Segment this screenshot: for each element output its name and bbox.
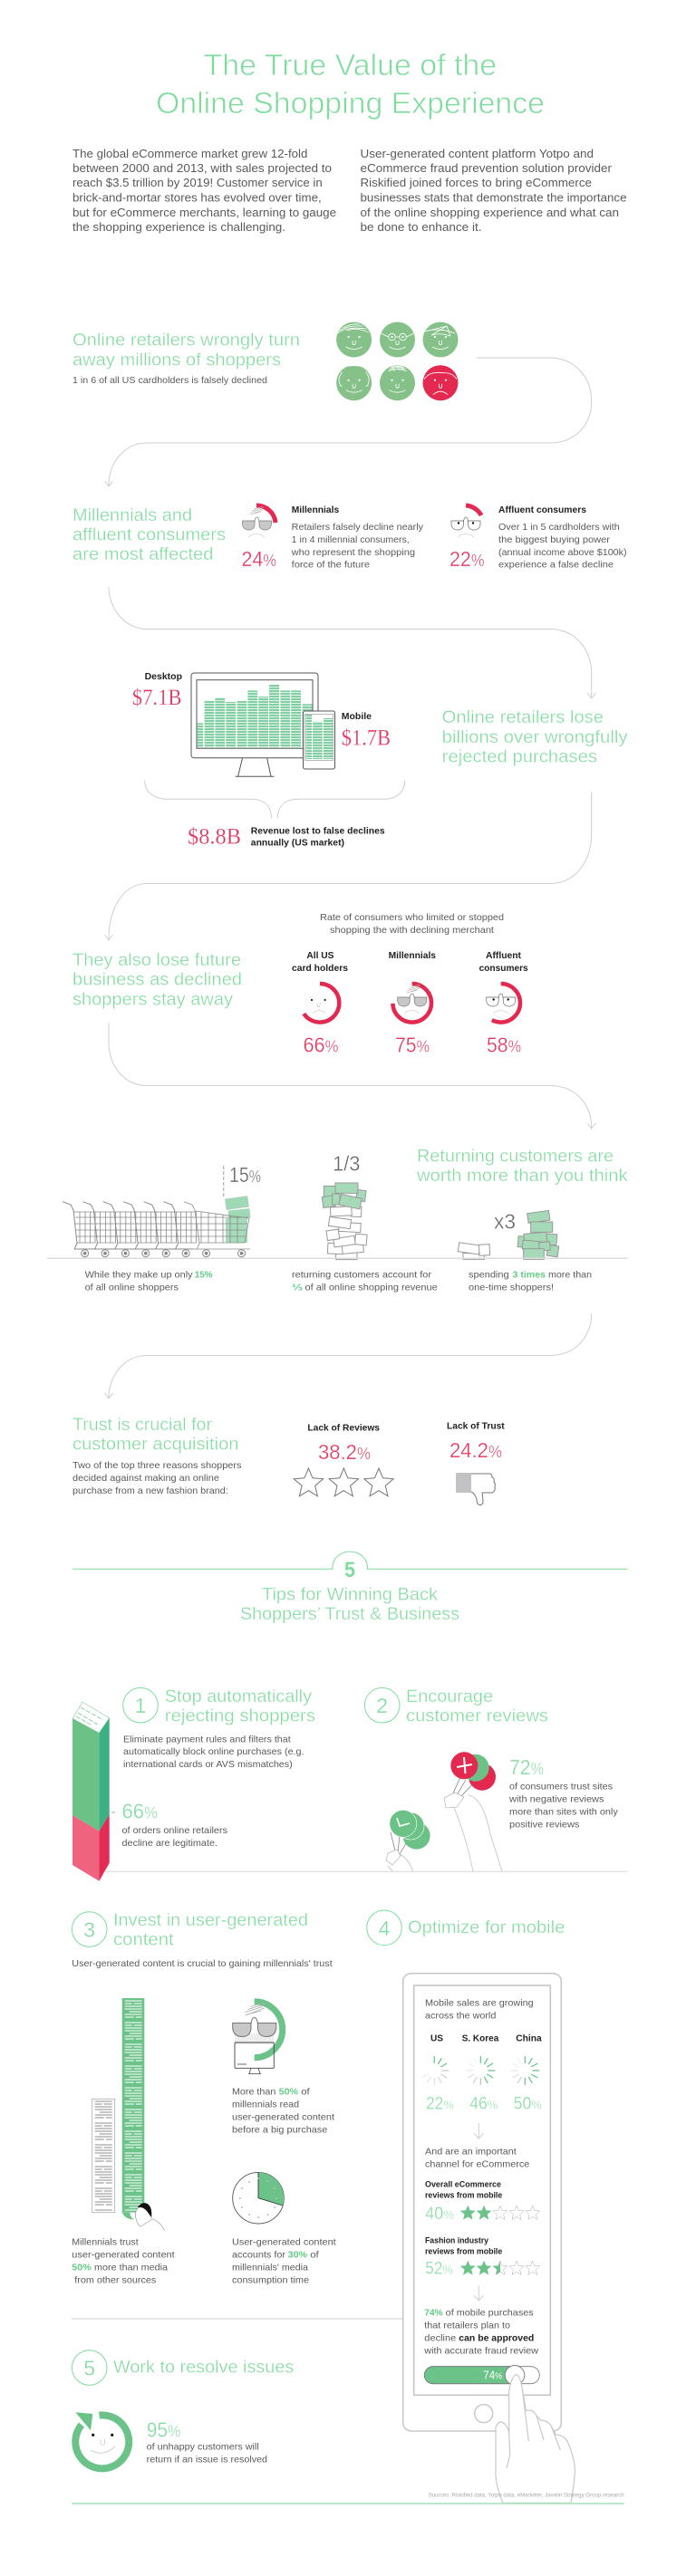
phone text: 74% can be approved: can be approved xyxy=(459,2333,534,2344)
phone text: 74% can be approved: decline xyxy=(424,2333,456,2344)
stat: 15% with dashed marker: 15% xyxy=(229,1163,261,1187)
connector arrow 3 xyxy=(105,792,592,940)
caption: 30% media time: 30% xyxy=(288,2250,308,2261)
connector arrow 5 xyxy=(105,1313,592,1399)
ring chart: all US card holders: All US xyxy=(306,950,334,961)
stat: overall reviews 40%: reviews from mobile xyxy=(425,2190,502,2200)
stat: 1/3: 1/3 xyxy=(333,1152,361,1176)
mobile label: $1.7B xyxy=(342,726,391,751)
stat: 66% legitimate: decline are legitimate. xyxy=(121,1838,218,1849)
icon: clock pie 30% xyxy=(233,2172,284,2224)
stat: 95%: 95% xyxy=(147,2418,180,2442)
connector arrow 1 xyxy=(105,358,592,486)
divider with 5 badge: 5 xyxy=(344,1558,355,1582)
toggle 74%: 74% xyxy=(483,2369,502,2382)
tip 5 heading: 5 xyxy=(83,2357,95,2380)
heading: wrongly turn away: away millions of shoppers xyxy=(72,351,281,370)
heading: millennials and affluent xyxy=(72,506,226,564)
icon: small white box stack xyxy=(458,1243,490,1259)
caption: 50% read UGC: user-generated content xyxy=(232,2112,334,2123)
tip 3 subtitle: User-generated content is crucial to gaining millennials' trust xyxy=(72,1958,333,1969)
heading: lose billions: Online retailers lose xyxy=(442,708,604,727)
icon: six faces xyxy=(336,322,459,400)
heading: wrongly turn away xyxy=(72,332,300,370)
spinner: US 22% xyxy=(421,2033,454,2113)
sources note: Sources: Riskified data, Yotpo data, eMarketer, Javelin Strategy Group research xyxy=(429,2493,624,2499)
phone text: 74% can be approved: that retailers plan to xyxy=(424,2321,510,2331)
divider xyxy=(72,2318,403,2320)
heading: millennials and affluent: Millennials and xyxy=(72,506,192,525)
trust text: purchase from a new fashion brand: xyxy=(72,1485,228,1496)
total revenue lost: Revenue lost to false declines xyxy=(251,826,385,837)
heading: lose billions: billions over wrongfully xyxy=(442,728,628,747)
icon: millennials arc xyxy=(243,505,276,537)
ring chart: all US card holders: card holders xyxy=(292,963,348,974)
caption: 15% of shoppers: 15% xyxy=(195,1270,213,1281)
title xyxy=(156,48,545,120)
stat: 66% legitimate: 66% xyxy=(121,1799,158,1822)
heading: lose future business: business as declined xyxy=(72,971,242,990)
heading: returning customers: worth more than you think xyxy=(416,1167,628,1186)
affluent text: Affluent consumers xyxy=(498,505,586,515)
stat: overall reviews 40%: 40% xyxy=(425,2205,454,2224)
tip 1 text: Eliminate payment rules and filters that xyxy=(123,1734,291,1745)
heading: returning customers xyxy=(416,1148,628,1186)
trust text: Two of the top three reasons shoppers xyxy=(72,1460,241,1471)
rate caption: Rate of consumers who limited or stopped xyxy=(320,912,504,923)
heading: lose future business: shoppers stay away xyxy=(72,990,234,1009)
trust text xyxy=(72,1460,241,1496)
heading: returning customers: Returning customers are xyxy=(417,1148,614,1167)
affluent text: (annual income above $100k) xyxy=(498,547,627,558)
desktop label xyxy=(132,671,182,710)
intro text left: the shopping experience is challenging. xyxy=(72,220,285,234)
tip 5 heading xyxy=(72,2350,294,2385)
intro text right: User-generated content platform Yotpo and xyxy=(361,147,594,160)
stat: 72%: positive reviews xyxy=(509,1820,579,1831)
ring chart: millennials: Millennials xyxy=(389,950,436,961)
caption: 15% of shoppers: of all online shoppers xyxy=(85,1283,179,1293)
arrow down xyxy=(474,2123,484,2139)
caption: 50% read UGC: millennials read xyxy=(232,2100,299,2110)
spinner: US 22%: 22% xyxy=(426,2094,454,2113)
caption: 50% more than media xyxy=(72,2237,175,2286)
caption: 3 times spend xyxy=(469,1270,592,1293)
icon: 3D card bar xyxy=(72,1702,110,1881)
caption: 15% of shoppers xyxy=(85,1270,213,1293)
stat: 72%: 72% xyxy=(509,1755,544,1779)
millennials text: force of the future xyxy=(292,560,370,571)
stat: x3: x3 xyxy=(494,1210,516,1234)
lack of trust stat: Lack of Trust xyxy=(447,1420,505,1431)
heading: millennials and affluent: are most affected xyxy=(72,545,214,564)
ring chart: millennials: 75% xyxy=(395,1033,430,1057)
heading: millennials and affluent: affluent consumers xyxy=(72,526,226,545)
stat: 15% with dashed marker xyxy=(224,1163,261,1198)
bottom rule xyxy=(72,2503,624,2504)
tip 2 heading xyxy=(364,1687,548,1726)
subtext: 1 in 6: 1 in 6 of all US cardholders is falsely declined xyxy=(72,375,267,386)
heading: trust is crucial: Trust is crucial for xyxy=(72,1416,213,1435)
intro text right: businesses stats that demonstrate the importance xyxy=(361,190,627,205)
caption: 30% media time: accounts for xyxy=(232,2250,286,2261)
affluent text: experience a false decline xyxy=(498,560,614,571)
caption: 50% more than media: from other sources xyxy=(74,2275,156,2286)
tip 3 heading xyxy=(72,1911,308,1949)
tip 5 heading: Work to resolve issues xyxy=(113,2358,294,2377)
stat: fashion reviews 52%: 52% xyxy=(425,2260,453,2279)
spinner: China 50%: China xyxy=(516,2033,542,2043)
tip 1 heading: 1 xyxy=(135,1694,146,1717)
stat: fashion reviews 52%: reviews from mobile xyxy=(425,2246,502,2256)
total revenue lost xyxy=(188,825,385,850)
icon: three stars xyxy=(294,1468,393,1496)
lack of reviews stat: Lack of Reviews xyxy=(307,1422,380,1433)
intro text left xyxy=(72,147,336,234)
spinner: US 22%: US xyxy=(430,2033,443,2043)
icon: media document xyxy=(92,2099,115,2213)
lack of trust stat xyxy=(447,1420,505,1462)
heading: 5 tips: Shoppers’ Trust & Business xyxy=(240,1605,459,1624)
total revenue lost: annually (US market) xyxy=(251,837,344,848)
caption: 3 times spend: spending xyxy=(469,1270,509,1281)
caption: 50% read UGC xyxy=(232,2087,334,2136)
caption: 3 times spend: 3 times xyxy=(513,1270,546,1281)
ring chart: all US card holders: 66% xyxy=(303,1033,338,1057)
caption: 50% more than media: 50% xyxy=(72,2263,92,2273)
millennials text: 1 in 4 millennial consumers, xyxy=(292,534,410,545)
icon: hand with plus signs xyxy=(444,1752,502,1871)
phone text: sales growing: across the world xyxy=(425,2010,496,2021)
affluent text: Over 1 in 5 cardholders with xyxy=(498,522,620,533)
rate caption xyxy=(320,912,504,936)
desktop label: Desktop xyxy=(145,671,182,682)
caption: 50% read UGC: of xyxy=(301,2087,310,2098)
spinner: S. Korea 46%: 46% xyxy=(469,2094,498,2113)
tip 3 heading: content xyxy=(113,1930,174,1949)
stat: 66% legitimate xyxy=(105,1799,227,1849)
stat: 66% legitimate: of orders online retailers xyxy=(121,1825,227,1836)
lack of trust stat: 24.2% xyxy=(450,1438,502,1462)
intro text left: reach $3.5 trillion by 2019! Customer service in xyxy=(72,176,323,189)
lack of reviews stat: 38.2% xyxy=(318,1440,371,1464)
panel: phone frame xyxy=(403,1974,561,2431)
ground line xyxy=(47,1257,628,1259)
heading: lose billions: rejected purchases xyxy=(442,748,597,767)
stat: 22%: 22% xyxy=(450,547,484,571)
intro text left: brick-and-mortar stores has evolved over time, xyxy=(72,190,322,205)
tip 4 heading: 4 xyxy=(379,1917,391,1940)
mobile label: Mobile xyxy=(342,711,372,722)
intro text right: of the online shopping experience and what can xyxy=(361,206,619,219)
millennials text: Millennials xyxy=(292,505,339,515)
caption: 50% read UGC: before a big purchase xyxy=(232,2125,327,2136)
tip 1 heading: rejecting shoppers xyxy=(165,1707,315,1726)
tip 3 heading: Invest in user-generated xyxy=(113,1911,308,1930)
stat: 95%: return if an issue is resolved xyxy=(147,2455,267,2465)
stat: 95% xyxy=(147,2418,267,2465)
phone text: important channel xyxy=(425,2147,529,2170)
stat: 72% xyxy=(508,1755,619,1831)
toggle 74% xyxy=(424,2366,539,2385)
title: The True Value of the xyxy=(204,48,497,82)
icon: user content document with reader xyxy=(122,1998,165,2231)
icon: smiling return arrow xyxy=(75,2412,129,2468)
tip 1 heading: Stop automatically xyxy=(165,1687,313,1706)
intro text right: eCommerce fraud prevention solution provider xyxy=(361,161,613,175)
phone text: sales growing xyxy=(425,1997,534,2021)
heading: lose future business xyxy=(72,951,242,1009)
phone text: 74% can be approved: with accurate fraud review xyxy=(423,2346,538,2357)
phone text: important channel: And are an important xyxy=(425,2147,517,2158)
tip 2 heading: customer reviews xyxy=(406,1707,548,1726)
spinner: S. Korea 46% xyxy=(462,2033,498,2113)
arrow down xyxy=(474,2285,484,2301)
tip 1 text: automatically block online purchases (e.g. xyxy=(123,1746,304,1757)
stat: 72%: of consumers trust sites xyxy=(509,1782,613,1793)
ring chart: affluent consumers: consumers xyxy=(479,963,528,974)
ring chart: all US card holders xyxy=(292,950,348,1057)
caption: 15% of shoppers: While they make up only xyxy=(85,1270,193,1281)
tip 3 heading: 3 xyxy=(83,1918,95,1942)
tip 2 heading: Encourage xyxy=(406,1687,493,1706)
heading: wrongly turn away: Online retailers wrongly turn xyxy=(72,332,300,351)
stat: fashion reviews 52% xyxy=(425,2236,540,2279)
intro text left: The global eCommerce market grew 12-fold xyxy=(72,147,307,160)
phone text: sales growing: Mobile sales are growing xyxy=(425,1997,534,2008)
caption: 30% media time: User-generated content xyxy=(232,2237,336,2248)
affluent text: the biggest buying power xyxy=(498,534,611,545)
caption: one third revenue: ⅓ xyxy=(292,1283,303,1293)
icon: shopping carts xyxy=(63,1196,250,1257)
millennials text: Retailers falsely decline nearly xyxy=(292,522,424,533)
desktop monitor with bar chart xyxy=(191,673,318,776)
heading: 5 tips: Tips for Winning Back xyxy=(262,1586,439,1605)
ground line tip 1-2 xyxy=(105,1870,628,1872)
caption: one third revenue: of all online shopping revenue xyxy=(304,1283,438,1293)
stat: 72%: with negative reviews xyxy=(508,1794,604,1805)
phone text: 74% can be approved xyxy=(423,2308,538,2357)
desktop label: $7.1B xyxy=(132,686,181,710)
heading: lose billions xyxy=(442,708,628,767)
heading: trust is crucial xyxy=(72,1416,239,1455)
stat: 24%: 24% xyxy=(241,547,276,571)
caption: 3 times spend: one-time shoppers! xyxy=(469,1283,554,1293)
heading: 5 tips xyxy=(240,1586,459,1624)
caption: 30% media time: of xyxy=(310,2250,319,2261)
caption: 30% media time: consumption time xyxy=(232,2275,309,2286)
stat: fashion reviews 52%: Fashion industry xyxy=(425,2236,489,2246)
ring chart: affluent consumers: Affluent xyxy=(486,950,521,961)
phone text: 74% can be approved: of mobile purchases xyxy=(446,2308,534,2319)
tip 2 heading: 2 xyxy=(376,1694,388,1717)
intro text right: Riskified joined forces to bring eCommerce xyxy=(361,176,592,189)
intro text left: between 2000 and 2013, with sales projected to xyxy=(72,161,332,175)
trust text: decided against making an online xyxy=(72,1473,219,1484)
icon: face with half arc and monitor xyxy=(233,2002,283,2074)
caption: one third revenue xyxy=(292,1270,438,1293)
ring chart: affluent consumers: 58% xyxy=(487,1033,521,1057)
caption: 50% more than media: user-generated content xyxy=(72,2250,175,2261)
caption: 50% read UGC: More than xyxy=(232,2087,276,2098)
caption: 50% more than media: more than media xyxy=(94,2263,168,2273)
spinner: S. Korea 46%: S. Korea xyxy=(462,2033,498,2043)
caption: 30% media time xyxy=(232,2237,336,2286)
caption: 50% more than media: Millennials trust xyxy=(72,2237,139,2248)
stat: overall reviews 40% xyxy=(425,2179,540,2224)
stat: 95%: of unhappy customers will xyxy=(147,2442,259,2453)
icon: green box stack xyxy=(517,1210,559,1259)
ring chart: affluent consumers xyxy=(479,950,528,1057)
caption: 50% read UGC: 50% xyxy=(279,2087,299,2098)
caption: 30% media time: millennials' media xyxy=(232,2263,308,2273)
millennials text: who represent the shopping xyxy=(291,547,415,558)
mobile label xyxy=(342,711,391,751)
total revenue lost: $8.8B xyxy=(188,825,241,850)
connector arrow 4 xyxy=(109,1023,596,1129)
title: Online Shopping Experience xyxy=(156,86,545,120)
caption: one third revenue: returning customers account for xyxy=(292,1270,432,1281)
brace xyxy=(145,781,405,818)
intro text right xyxy=(361,147,627,234)
heading: trust is crucial: customer acquisition xyxy=(72,1436,239,1455)
icon: thumbs down xyxy=(456,1473,495,1505)
tip 1 text xyxy=(123,1734,304,1770)
intro text right: be done to enhance it. xyxy=(361,220,482,234)
millennials text xyxy=(291,505,424,571)
tip 1 heading xyxy=(123,1687,315,1726)
intro text left: but for eCommerce merchants, learning to gauge xyxy=(72,206,336,219)
spinner: China 50% xyxy=(510,2033,542,2113)
icon: pointing hand xyxy=(496,2375,575,2503)
divider with 5 badge xyxy=(72,1552,628,1582)
icon: affluent arc xyxy=(451,505,481,537)
mobile phone with bar chart xyxy=(303,711,335,769)
phone text: important channel: channel for eCommerce xyxy=(425,2159,529,2170)
rate caption: shopping the with declining merchant xyxy=(330,925,494,936)
tip 4 heading: Optimize for mobile xyxy=(408,1918,565,1937)
tip 1 text: international cards or AVS mismatches) xyxy=(123,1759,293,1770)
lack of reviews stat xyxy=(307,1422,380,1464)
icon: tall box stack xyxy=(322,1183,367,1260)
ring chart: millennials xyxy=(389,950,436,1057)
spinner: China 50%: 50% xyxy=(514,2094,542,2113)
stat: overall reviews 40%: Overall eCommerce xyxy=(425,2179,501,2189)
icon: hand with check signs xyxy=(386,1810,430,1871)
connector arrow 2 xyxy=(109,587,596,698)
stat: 72%: more than sites with only xyxy=(509,1807,619,1818)
caption: 3 times spend: more than xyxy=(548,1270,592,1281)
phone text: 74% can be approved: 74% xyxy=(424,2308,443,2319)
tip 4 heading xyxy=(367,1910,565,1946)
affluent text xyxy=(498,505,627,571)
heading: lose future business: They also lose future xyxy=(72,951,241,970)
